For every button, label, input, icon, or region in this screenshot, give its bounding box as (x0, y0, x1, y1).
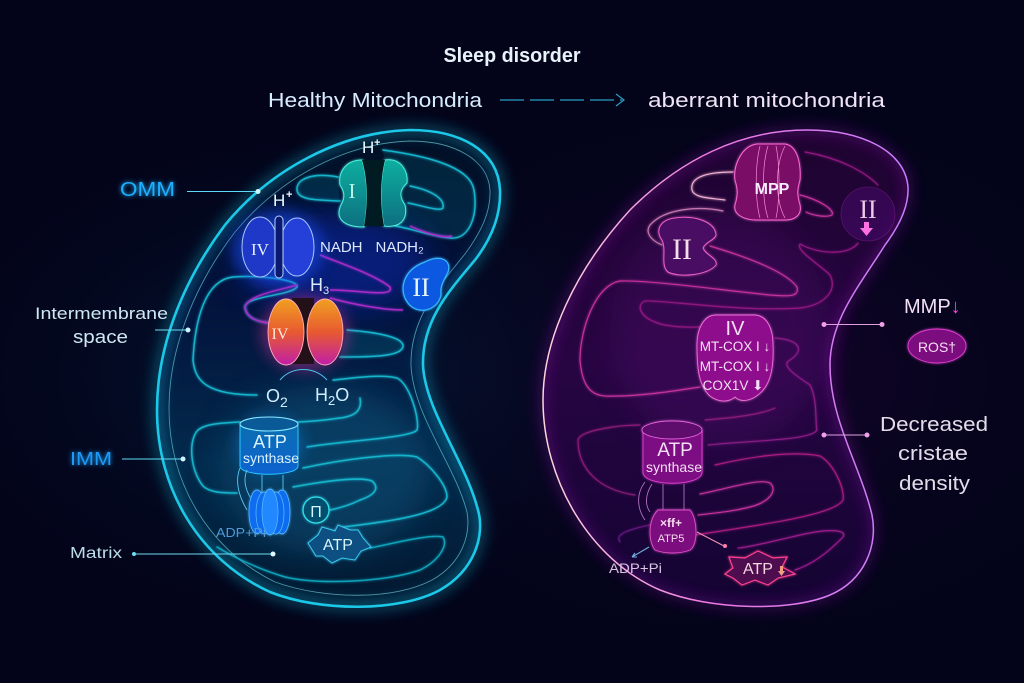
complex II small with down arrow (841, 187, 895, 241)
H3 label: H (310, 275, 323, 295)
ATP to product line (697, 532, 727, 548)
pointer: cristae (822, 432, 870, 438)
complex I (339, 160, 407, 227)
label: decreased cristae density: cristae (898, 443, 968, 465)
NADH labels: NADH NADH₂ (320, 239, 424, 256)
ATP reduced star: ATP (743, 561, 773, 578)
O2 and H2O labels: H (315, 385, 328, 405)
complex II small with down arrow: II (859, 195, 877, 224)
complex MPP (735, 144, 800, 220)
H+ left label (273, 189, 292, 210)
ATP5 rotor: ATP5 (658, 533, 684, 545)
ATP5 rotor: ×ff+ (660, 516, 682, 530)
complex II blue: II (412, 273, 430, 302)
pi circle (303, 497, 329, 523)
complex IV blue: IV (251, 240, 270, 259)
H+ left label: H (273, 191, 285, 210)
ATP synthase rotor (249, 489, 290, 535)
ATP synthase aberrant: synthase (646, 459, 702, 475)
label: intermembrane space: space (73, 327, 128, 347)
subtitle: healthy mitochondria: Healthy Mitochondria (268, 90, 483, 112)
O2 and H2O labels: 2 (280, 394, 288, 410)
stalk lines (639, 482, 684, 520)
label: matrix: Matrix (70, 545, 122, 562)
label: matrix (70, 545, 276, 562)
subtitle: aberrant mitochondria: aberrant mitochondria (648, 90, 886, 112)
ADP+Pi arrow (632, 547, 649, 557)
cristae folds (192, 150, 475, 581)
complex I: I (348, 179, 356, 203)
pointer: MMP (822, 322, 884, 327)
H+ top label: H (362, 138, 374, 157)
ROS badge (908, 329, 966, 363)
ADP+Pi label healthy: ADP+Pi (216, 525, 266, 540)
complex IV aberrant: COX1V ⬇ (703, 378, 763, 393)
label: decreased cristae density: Decreased (880, 414, 988, 436)
O2 and H2O labels: O (266, 386, 280, 406)
complex II aberrant (659, 217, 716, 275)
complex II aberrant: II (672, 233, 692, 266)
ROS badge: ROS† (918, 339, 956, 355)
H3 label: 3 (323, 285, 329, 297)
complex IV aberrant: MT-COX I ↓ (700, 359, 770, 374)
label: intermembrane space: Intermembrane (35, 304, 168, 323)
ATP product star (308, 525, 371, 563)
title: Sleep disorder (444, 45, 581, 67)
H+ left label: + (286, 189, 292, 201)
ATP reduced star (725, 551, 795, 585)
complex IV blue (232, 210, 324, 286)
complex IV aberrant (697, 315, 773, 401)
arrow: healthy to aberrant (500, 94, 624, 106)
label: IMM: IMM (70, 449, 112, 469)
complex MPP: MPP (755, 181, 790, 198)
ATP product star: ATP (323, 537, 353, 554)
O2 and H2O labels (266, 370, 349, 410)
complex IV orange (261, 295, 349, 371)
ATP synthase healthy: ATP (253, 432, 287, 452)
H+ top label (362, 137, 380, 157)
cristae folds aberrant (578, 152, 878, 570)
label: intermembrane space (35, 304, 190, 347)
complex IV aberrant: MT-COX I ↓ (700, 339, 770, 354)
label: decreased cristae density (880, 414, 988, 495)
ATP5 rotor (650, 510, 696, 553)
complex IV aberrant: IV (726, 318, 745, 340)
pi circle: Π (310, 504, 322, 521)
label: MMP down: MMP↓ (904, 296, 961, 318)
ATP synthase aberrant (642, 421, 702, 483)
panel: aberrant mitochondrion (543, 130, 908, 606)
O2 and H2O labels: O (335, 385, 349, 405)
complex IV orange: IV (272, 326, 289, 343)
ATP synthase healthy (236, 415, 304, 510)
O2 and H2O labels: 2 (328, 393, 335, 408)
H+ top label: + (374, 137, 380, 149)
ATP synthase healthy: synthase (243, 450, 299, 466)
ATP synthase aberrant: ATP (657, 440, 693, 461)
label: OMM (120, 179, 260, 201)
panel: healthy mitochondrion (157, 130, 500, 607)
label: OMM: OMM (120, 179, 175, 201)
label: decreased cristae density: density (899, 473, 970, 495)
ADP+Pi label aberrant: ADP+Pi (609, 560, 662, 576)
label: IMM (70, 449, 186, 469)
complex II blue (403, 258, 449, 310)
